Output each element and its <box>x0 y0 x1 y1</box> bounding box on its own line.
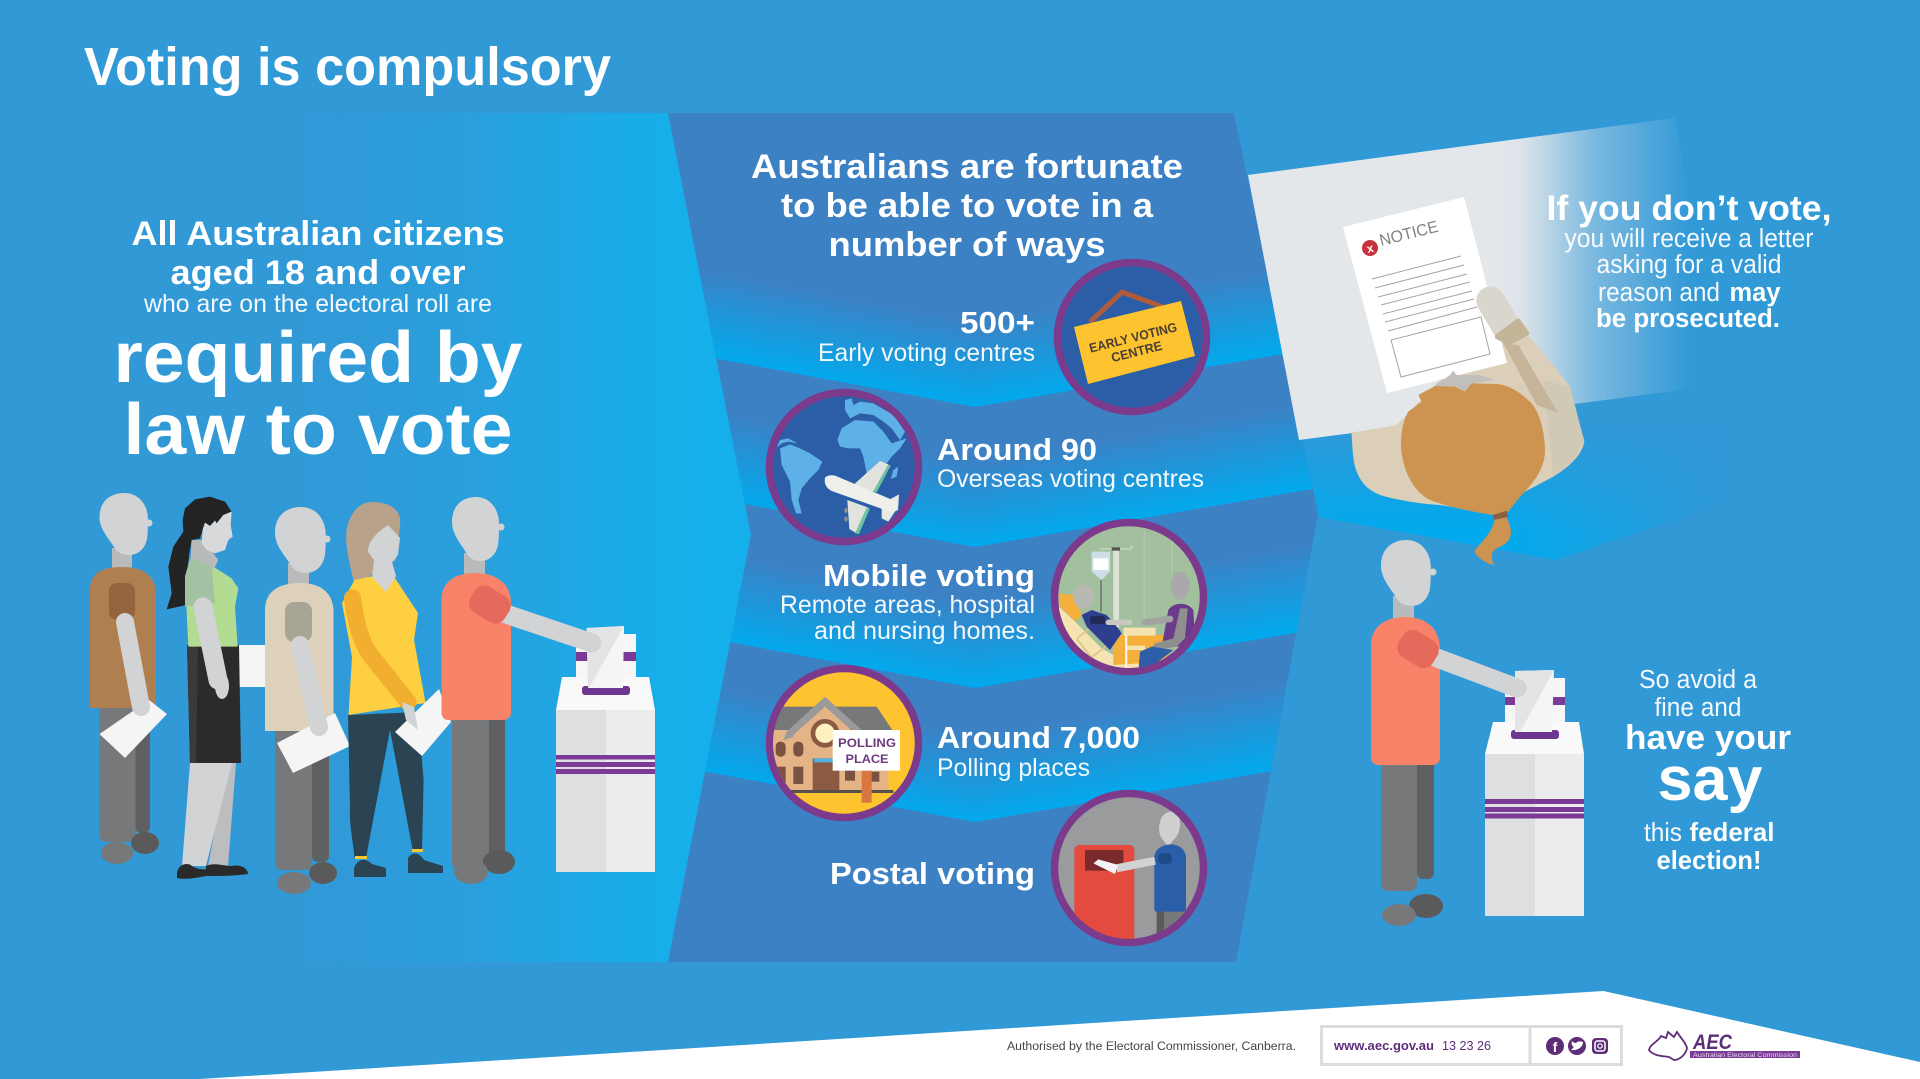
text block: if you don't vote: be prosecuted. <box>1596 305 1780 333</box>
icon: post box <box>1054 794 1204 942</box>
notice document: x <box>1365 241 1375 256</box>
item: overseas voting centres <box>937 432 1204 493</box>
item: overseas voting centres: Overseas voting centres <box>937 465 1204 493</box>
heading: ways to vote <box>751 148 1183 264</box>
text block: required by law <box>114 215 522 470</box>
text block: have your say <box>1625 666 1791 875</box>
reader hand, arm and hair <box>1401 301 1558 565</box>
person 1 brown shirt <box>90 493 167 864</box>
item: postal voting: Postal voting <box>830 856 1035 891</box>
heading: ways to vote: Australians are fortunate <box>751 148 1183 186</box>
authorisation line: Authorised by the Electoral Commissioner, Canberra. <box>1007 1041 1296 1053</box>
AEC logo: Australian Electoral Commission <box>1693 1053 1797 1059</box>
text block: have your say: election! <box>1656 845 1762 875</box>
footer: white band <box>200 991 1920 1079</box>
text block: have your say: have your <box>1625 719 1791 757</box>
text block: have your say: this <box>1644 817 1682 847</box>
AEC logo <box>1649 1031 1800 1060</box>
panel: centre ways to vote <box>660 113 1330 962</box>
item: polling places: Around 7,000 <box>937 720 1140 755</box>
item: mobile voting: Remote areas, hospital <box>780 591 1035 619</box>
person 4 yellow shirt <box>342 502 451 877</box>
heading: ways to vote: number of ways <box>828 226 1106 264</box>
text block: if you don't vote: If you don’t vote, <box>1546 189 1832 228</box>
text block: have your say: fine and <box>1654 694 1742 722</box>
item: mobile voting: and nursing homes. <box>814 617 1035 645</box>
item: early voting centres <box>818 305 1035 367</box>
person 5 coral shirt <box>442 497 515 884</box>
illustration: letter sheet <box>1248 118 1720 440</box>
text block: required by law: law to vote <box>124 390 512 470</box>
title: Voting is compulsory <box>84 37 611 97</box>
text block: if you don't vote: asking for a valid <box>1596 251 1782 279</box>
text block: have your say: federal <box>1690 817 1774 847</box>
text block: if you don't vote: may <box>1730 279 1781 307</box>
icon: hospital mobile voting <box>1054 522 1204 675</box>
icon: globe and plane <box>770 392 918 542</box>
illustration: voter at ballot box <box>1371 540 1584 926</box>
text block: required by law: All Australian citizens <box>132 215 504 253</box>
text block: have your say: So avoid a <box>1639 666 1758 694</box>
notice document: NOTICE <box>1378 218 1440 250</box>
icon: polling place building: POLLING <box>838 736 896 750</box>
icon: early voting sign: CENTRE <box>1110 338 1164 365</box>
illustration: queue of voters <box>90 493 655 894</box>
panel: right cyan band behind reader <box>1304 442 1688 560</box>
item: early voting centres: 500+ <box>960 305 1035 340</box>
text block: required by law: required by <box>114 318 522 398</box>
contact box: 13 23 26 <box>1442 1039 1491 1053</box>
illustration: person reading notice <box>1343 197 1584 565</box>
contact box: f <box>1553 1039 1558 1055</box>
panel: left gradient chevron <box>300 113 751 962</box>
item: overseas voting centres: Around 90 <box>937 432 1097 467</box>
contact box: www.aec.gov.au <box>1333 1039 1434 1053</box>
item: mobile voting <box>780 558 1035 645</box>
icon: polling place building: PLACE <box>846 752 888 766</box>
heading: ways to vote: to be able to vote in a <box>781 187 1154 225</box>
item: polling places: Polling places <box>937 754 1090 782</box>
item: polling places <box>937 720 1140 782</box>
text block: if you don't vote: you will receive a letter <box>1564 225 1814 253</box>
item: mobile voting: Mobile voting <box>823 558 1035 593</box>
notice document <box>1343 197 1507 393</box>
icon: early voting sign <box>1058 262 1206 412</box>
contact box <box>1322 1026 1622 1065</box>
text block: have your say: say <box>1658 745 1763 814</box>
icon: early voting sign: EARLY VOTING <box>1088 319 1179 356</box>
ballot box <box>465 581 655 872</box>
text block: required by law: who are on the electoral roll are <box>143 290 492 318</box>
text block: if you don't vote: reason and <box>1598 279 1720 307</box>
icon: polling place building <box>770 668 918 818</box>
text block: if you don't vote <box>1546 189 1832 333</box>
text block: required by law: aged 18 and over <box>170 254 466 292</box>
item: early voting centres: Early voting centres <box>818 339 1035 367</box>
person 3 beige shirt <box>265 507 350 894</box>
AEC logo: AEC <box>1692 1031 1733 1054</box>
person 2 green shirt <box>167 497 268 879</box>
